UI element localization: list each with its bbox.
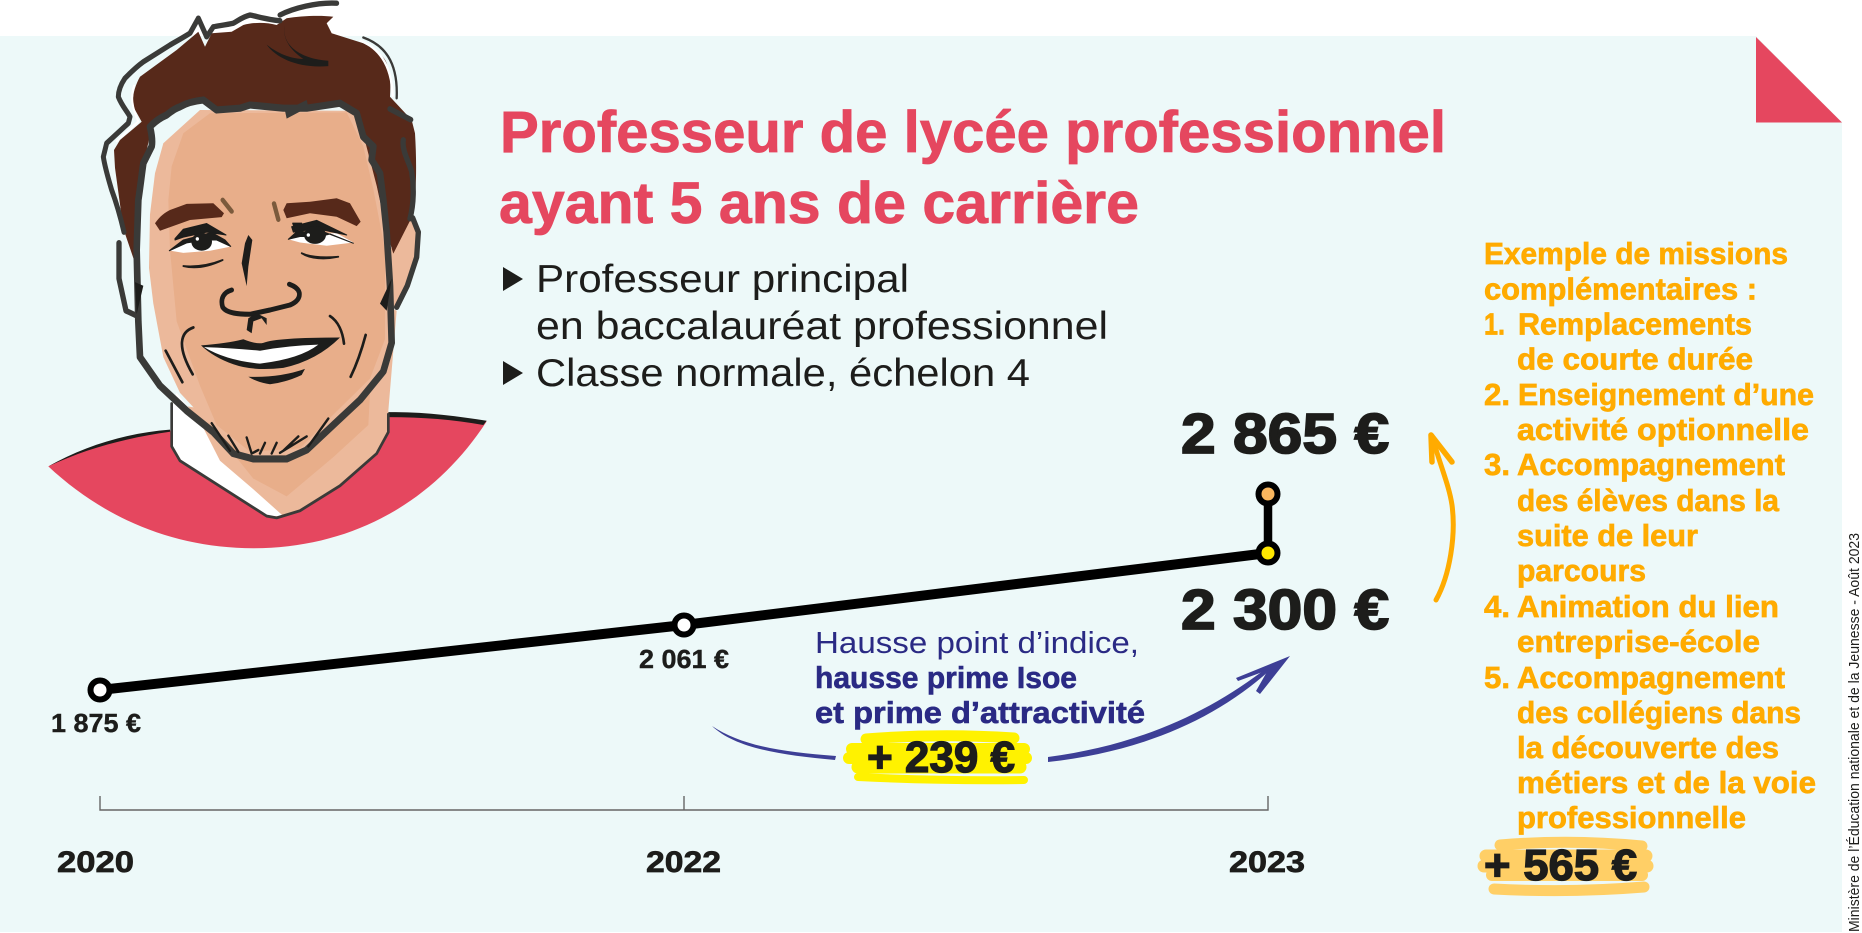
year labels: 2020 (57, 846, 134, 879)
text block: complementary missions: professionnelle (1517, 800, 1746, 835)
smile lines (166, 316, 366, 382)
text block: profile details: Professeur principal (536, 258, 909, 301)
hairline patch (285, 100, 308, 119)
text block: complementary missions: 5. (1484, 660, 1510, 695)
text block: complementary missions: Enseignement d’une (1518, 377, 1814, 412)
hair strokes (103, 3, 337, 232)
point 2022 (674, 616, 694, 634)
text block: profile details: Classe normale, échelon 4 (536, 352, 1030, 395)
arrow: orange upward arrow (1431, 435, 1453, 600)
text block: complementary missions: de courte durée (1517, 342, 1753, 376)
text block: profile details: en baccalauréat professionnel (536, 305, 1108, 348)
text block: complementary missions: complémentaires : (1484, 272, 1757, 306)
point 2020 (90, 680, 110, 700)
title: Professeur de lycée professionnel (500, 100, 1446, 165)
nose (242, 235, 252, 286)
illustration: smiling teacher portrait (48, 3, 487, 548)
text block: complementary missions: Accompagnement (1517, 660, 1785, 695)
text block: complementary missions: activité optionnelle (1517, 412, 1809, 447)
text block: complementary missions (1484, 236, 1816, 835)
text block: index and bonus increase (815, 625, 1145, 730)
text block: profile details (503, 258, 1108, 395)
text block: complementary missions: suite de leur (1517, 518, 1698, 553)
text block: index and bonus increase: hausse prime Isoe (815, 660, 1077, 695)
beard (212, 419, 328, 454)
eyebrows (155, 198, 361, 231)
text block: complementary missions: métiers et de la voie (1517, 765, 1816, 800)
text block: complementary missions: Remplacements (1518, 306, 1752, 342)
value: 1 875 euros: 1 875 € (51, 708, 141, 738)
text block: complementary missions: 1. (1484, 306, 1505, 342)
text block: index and bonus increase: et prime d’attractivité (815, 695, 1145, 730)
year labels: 2023 (1229, 846, 1305, 879)
callout: plus 239 euros on yellow highlight: + 239 € (867, 733, 1015, 782)
year labels: 2022 (646, 846, 721, 879)
line chart: salary evolution (90, 484, 1278, 700)
callout: plus 565 euros on orange highlight: + 565 € (1484, 841, 1637, 890)
icon: bullet triangle (503, 361, 523, 385)
text block: index and bonus increase: Hausse point d’indice, (815, 625, 1139, 660)
icon: bullet triangle (503, 267, 523, 291)
time axis (100, 796, 1268, 810)
text block: complementary missions: Animation du lien (1517, 589, 1779, 624)
year labels (57, 846, 1305, 879)
text block: complementary missions: des collégiens dans (1517, 695, 1801, 730)
text block: complementary missions: 4. (1484, 589, 1510, 624)
title: ayant 5 ans de carrière (499, 171, 1139, 236)
text block: complementary missions: parcours (1517, 553, 1646, 588)
face skin (149, 110, 391, 457)
title (499, 100, 1446, 236)
neck and white collar (172, 304, 397, 518)
point 2023 base (1258, 544, 1278, 562)
red shirt (48, 414, 487, 548)
hair (114, 16, 416, 268)
shirt collar edges (48, 412, 487, 466)
mouth (201, 337, 340, 369)
right ear fill (390, 218, 418, 307)
text block: complementary missions: Exemple de missions (1484, 236, 1788, 271)
text block: complementary missions: la découverte des (1517, 730, 1779, 765)
icon: folded red corner (1756, 37, 1842, 122)
face outline (137, 100, 392, 459)
text block: complementary missions: des élèves dans la (1517, 483, 1780, 518)
value: 2 061 euros: 2 061 € (639, 644, 729, 674)
eyes (171, 233, 353, 253)
arrow: blue right arrow (1048, 656, 1290, 762)
text block: complementary missions: Accompagnement (1517, 447, 1785, 482)
value: 2 865 euros: 2 865 € (1181, 402, 1389, 466)
text block: complementary missions: entreprise-école (1517, 624, 1760, 659)
point 2023 with missions (1258, 484, 1278, 504)
value: 2 300 euros: 2 300 € (1181, 578, 1389, 642)
arrow: blue left stroke (712, 726, 836, 760)
text block: complementary missions: 2. (1484, 377, 1510, 412)
ears (119, 218, 418, 316)
text block: complementary missions: 3. (1484, 447, 1510, 482)
